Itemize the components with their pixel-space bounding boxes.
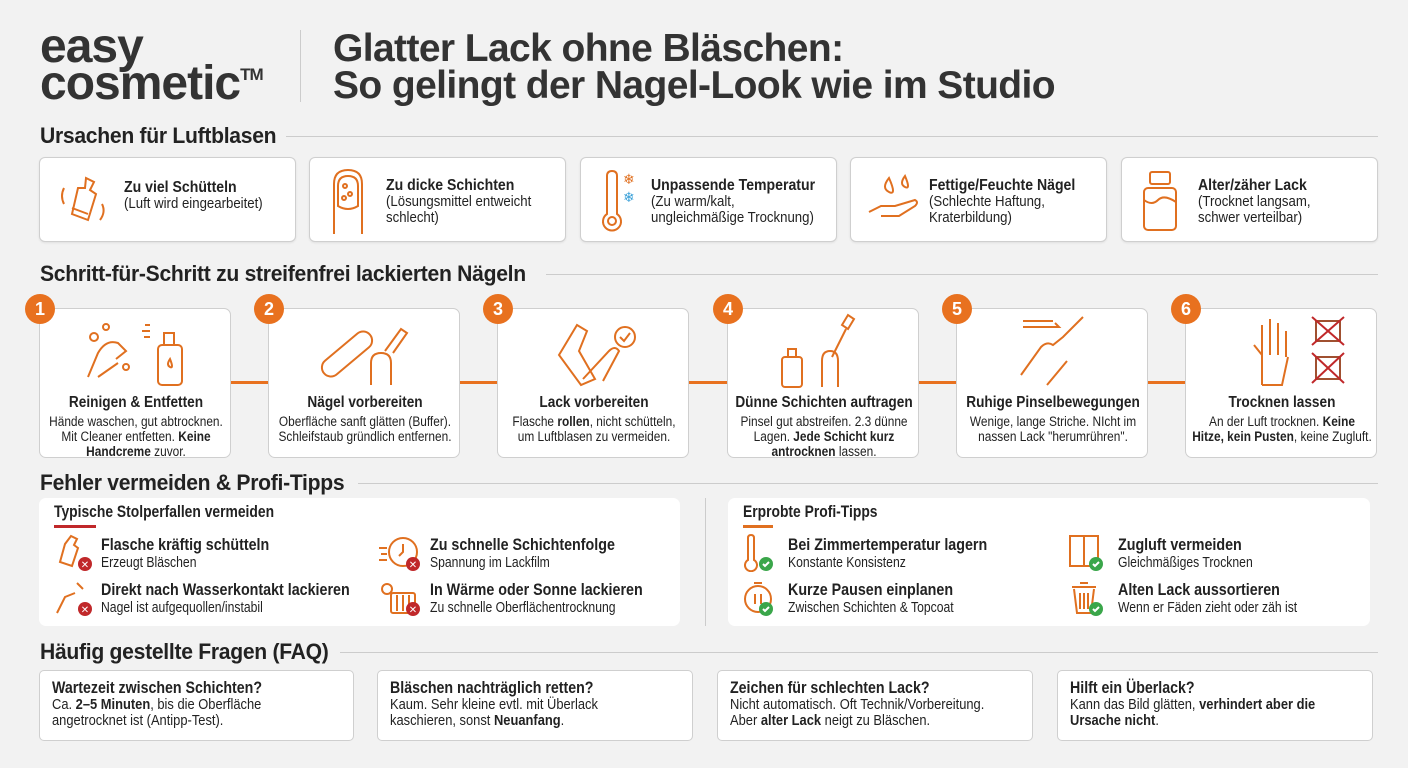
item: water: Nagel ist aufgequollen/instabil <box>101 600 263 616</box>
heading: mistakes and tips: Fehler vermeiden & Profi-Tipps <box>40 470 344 495</box>
icon: old bottle <box>1143 171 1177 231</box>
cause card 5: Alter/zäher Lack <box>1198 177 1307 194</box>
item: shaking: Flasche kräftig schütteln <box>101 535 269 554</box>
cause card 2: schlecht) <box>386 209 439 226</box>
tip: pauses <box>744 580 954 616</box>
icon: brush strokes <box>1020 316 1084 386</box>
heading: FAQ: Häufig gestellte Fragen (FAQ) <box>40 639 329 664</box>
step 5: Wenige, lange Striche. NIcht im <box>970 414 1136 429</box>
cause card 2: Zu dicke Schichten <box>386 177 514 194</box>
FAQ 3: Aber alter Lack neigt zu Bläschen. <box>730 712 930 729</box>
step numbers <box>25 294 1201 324</box>
FAQ 3 <box>717 670 1033 741</box>
item: water: Direkt nach Wasserkontakt lackieren <box>101 580 350 599</box>
step numbers: 1 <box>35 299 45 319</box>
cause card 4: Fettige/Feuchte Nägel <box>929 177 1075 194</box>
panel: pro tips <box>728 498 1370 626</box>
tip: discard old polish <box>1072 580 1298 616</box>
step 4: antrocknen lassen. <box>772 444 876 459</box>
item: fast layers <box>379 535 615 571</box>
FAQ 2 <box>377 670 693 741</box>
step 5: nassen Lack "herumrühren". <box>978 429 1128 444</box>
icon: thermometer <box>602 170 635 232</box>
FAQ 1: Ca. 2–5 Minuten, bis die Oberfläche <box>52 696 261 713</box>
icon: hand and crossed heater/fan <box>1253 316 1345 386</box>
item: fast layers: Zu schnelle Schichtenfolge <box>430 535 615 554</box>
tip: room temperature <box>744 534 987 572</box>
icon: washing hands <box>87 323 183 386</box>
tip: pauses: Zwischen Schichten & Topcoat <box>788 600 954 616</box>
tip: pauses: Kurze Pausen einplanen <box>788 580 953 599</box>
icon: nail with bubbles <box>333 169 363 234</box>
icon: rolling bottle in hands <box>558 324 636 386</box>
panel: pitfalls <box>39 498 680 626</box>
item: shaking: Erzeugt Bläschen <box>101 555 196 571</box>
cause card 2: (Lösungsmittel entweicht <box>386 193 531 210</box>
step 1: Mit Cleaner entfetten. Keine <box>61 429 211 444</box>
icon: bottle and brush <box>781 314 856 388</box>
step numbers: 3 <box>493 299 503 319</box>
item: heat <box>381 580 643 616</box>
cause card 3: ungleichmäßige Trocknung) <box>651 209 814 226</box>
step 6: Hitze, kein Pusten, keine Zugluft. <box>1192 429 1372 444</box>
tip: draft <box>1069 535 1253 571</box>
FAQ 3: Zeichen für schlechten Lack? <box>730 679 930 697</box>
step 1: Reinigen & Entfetten <box>69 394 203 411</box>
step 4 <box>727 308 919 458</box>
item: heat: ✕ <box>409 605 417 616</box>
cause card 4 <box>850 157 1107 242</box>
step 2: Schleifstaub gründlich entfernen. <box>278 429 452 444</box>
FAQ 2: Bläschen nachträglich retten? <box>390 679 593 697</box>
item: shaking <box>58 534 269 571</box>
step 6: An der Luft trocknen. Keine <box>1209 414 1355 429</box>
FAQ 4 <box>1057 670 1373 741</box>
tip: draft: Zugluft vermeiden <box>1118 535 1242 554</box>
logo <box>40 20 263 110</box>
heading: causes: Ursachen für Luftblasen <box>40 123 276 148</box>
item: heat: Zu schnelle Oberflächentrocknung <box>430 600 616 616</box>
icon: shaking bottle <box>61 176 105 222</box>
step 2: Nägel vorbereiten <box>307 394 423 411</box>
cause card 4: (Schlechte Haftung, <box>929 193 1045 210</box>
item: heat: In Wärme oder Sonne lackieren <box>430 580 643 599</box>
step 2: Oberfläche sanft glätten (Buffer). <box>279 414 451 429</box>
step 2 <box>268 308 460 458</box>
FAQ 1 <box>39 670 354 741</box>
step 4: Dünne Schichten auftragen <box>735 394 913 411</box>
connectors <box>231 381 1185 384</box>
title <box>333 27 1055 107</box>
FAQ 2: kaschieren, sonst Neuanfang. <box>390 712 564 729</box>
icon: thermometer: ❄ <box>623 171 635 187</box>
step 3: Flasche rollen, nicht schütteln, <box>512 414 676 429</box>
cause card 4: Kraterbildung) <box>929 209 1012 226</box>
step 1: Handcreme zuvor. <box>86 444 186 459</box>
step 4: Lagen. Jede Schicht kurz <box>754 429 894 444</box>
tip: discard old polish: Wenn er Fäden zieht oder zäh ist <box>1118 600 1297 616</box>
step 3: Lack vorbereiten <box>539 394 649 411</box>
FAQ 4: Ursache nicht. <box>1070 712 1159 729</box>
step numbers: 2 <box>264 299 274 319</box>
FAQ 4: Kann das Bild glätten, verhindert aber die <box>1070 696 1315 713</box>
step 6 <box>1185 308 1377 458</box>
tip: discard old polish: Alten Lack aussortieren <box>1118 580 1280 599</box>
logo: cosmeticTM <box>40 57 263 110</box>
cause card 3: Unpassende Temperatur <box>651 177 815 194</box>
step 1: Hände waschen, gut abtrocknen. <box>49 414 223 429</box>
cause card 2 <box>309 157 566 242</box>
item: shaking: ✕ <box>81 560 89 571</box>
title: So gelingt der Nagel-Look wie im Studio <box>333 64 1055 107</box>
tip: draft: Gleichmäßiges Trocknen <box>1118 555 1253 571</box>
cause card 3 <box>580 157 837 242</box>
heading: steps: Schritt-für-Schritt zu streifenfrei lackierten Nägeln <box>40 261 526 286</box>
panel: pro tips: Erprobte Profi-Tipps <box>743 503 878 521</box>
step numbers: 6 <box>1181 299 1191 319</box>
FAQ 4: Hilft ein Überlack? <box>1070 679 1195 697</box>
cause card 5: (Trocknet langsam, <box>1198 193 1310 210</box>
tip: room temperature: Konstante Konsistenz <box>788 555 906 571</box>
item: fast layers: ✕ <box>409 560 417 571</box>
panel: pitfalls: Typische Stolperfallen vermeiden <box>54 503 274 521</box>
step numbers: 4 <box>723 299 733 319</box>
step 3: um Luftblasen zu vermeiden. <box>518 429 670 444</box>
FAQ 3: Nicht automatisch. Oft Technik/Vorbereitung. <box>730 696 984 713</box>
cause card 1: Zu viel Schütteln <box>124 179 237 196</box>
FAQ 2: Kaum. Sehr kleine evtl. mit Überlack <box>390 696 598 713</box>
step 5 <box>956 308 1148 458</box>
FAQ 1: angetrocknet ist (Antipp-Test). <box>52 712 223 729</box>
step numbers: 5 <box>952 299 962 319</box>
logo: easy <box>40 20 143 73</box>
cause card 5 <box>1121 157 1378 242</box>
icon: hand with drops <box>868 174 918 217</box>
item: water: ✕ <box>81 605 89 616</box>
title: Glatter Lack ohne Bläschen: <box>333 27 843 70</box>
icon: buffer and nail <box>320 328 408 385</box>
icon: thermometer: ❄ <box>623 189 635 205</box>
step 3 <box>497 308 689 458</box>
step 1 <box>39 308 231 458</box>
step 5: Ruhige Pinselbewegungen <box>966 394 1140 411</box>
step 4: Pinsel gut abstreifen. 2.3 dünne <box>740 414 908 429</box>
cause card 5: schwer verteilbar) <box>1198 209 1302 226</box>
cause card 1 <box>39 157 296 242</box>
item: water <box>56 580 350 616</box>
FAQ 1: Wartezeit zwischen Schichten? <box>52 679 262 697</box>
tip: room temperature: Bei Zimmertemperatur lagern <box>788 535 987 554</box>
cause card 3: (Zu warm/kalt, <box>651 193 735 210</box>
item: fast layers: Spannung im Lackfilm <box>430 555 550 571</box>
panel: causes <box>39 157 1378 243</box>
cause card 1: (Luft wird eingearbeitet) <box>124 195 263 212</box>
step 6: Trocknen lassen <box>1229 394 1335 411</box>
